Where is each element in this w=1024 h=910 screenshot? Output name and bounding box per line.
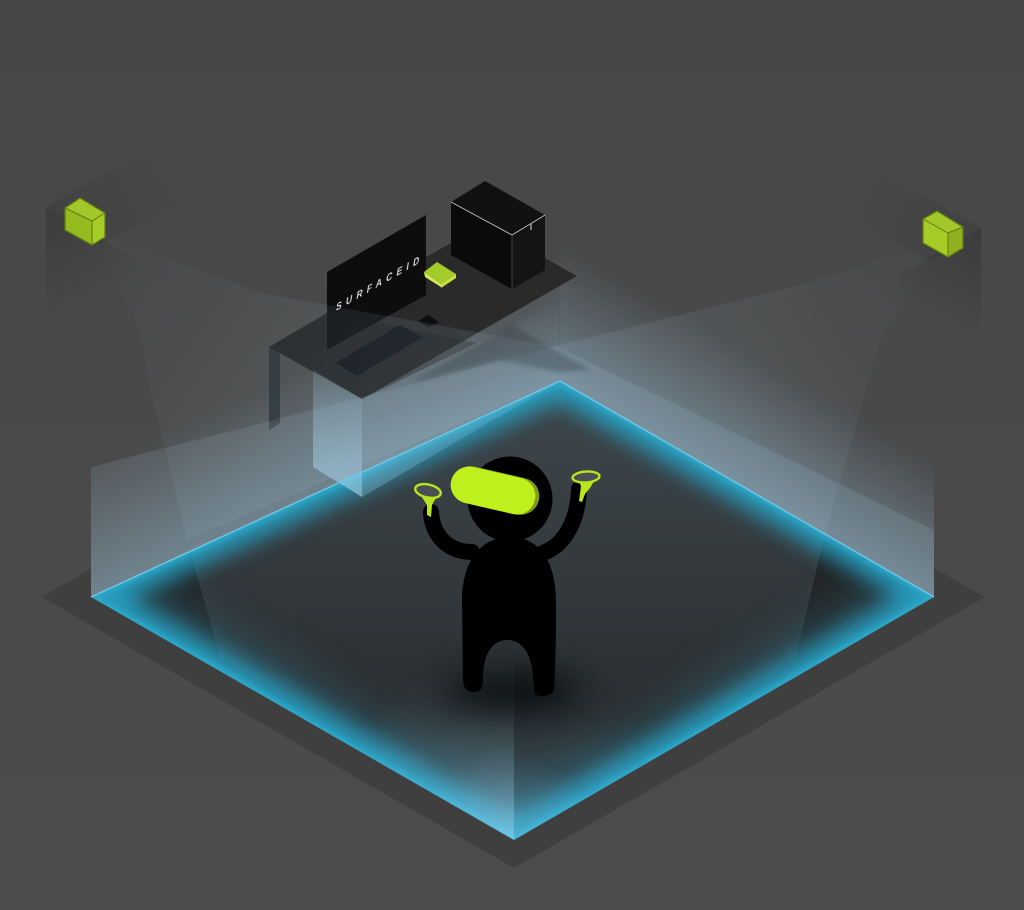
brand text: SURFACEID: [336, 253, 423, 314]
left camera corner shade: [46, 140, 230, 335]
desk shadow wedge: [410, 325, 590, 383]
floor edge line: [91, 381, 934, 597]
front walls: [384, 691, 601, 840]
person: [414, 456, 600, 696]
floor: [91, 381, 934, 840]
computer box: [451, 181, 545, 289]
light beam from right camera: [91, 240, 945, 597]
keyboard: [335, 325, 423, 376]
desk front shading: [269, 312, 477, 399]
desk top: [269, 224, 577, 399]
desk: [269, 181, 577, 430]
back walls: [91, 244, 934, 597]
lit floor area: [194, 392, 822, 772]
head: [468, 456, 552, 542]
right controller: [572, 471, 600, 502]
left controller: [414, 482, 442, 517]
mouse pad: [418, 315, 439, 327]
monitor: [327, 215, 426, 350]
body: [462, 537, 556, 696]
floor shadow: [42, 568, 985, 868]
green device: [424, 262, 456, 288]
light beam from left camera: [95, 230, 934, 597]
person shadow: [438, 672, 582, 712]
right camera corner shade: [820, 165, 981, 360]
left camera: [65, 198, 105, 245]
right arm: [543, 489, 579, 553]
floor glow: [91, 381, 934, 840]
left arm: [431, 512, 472, 552]
headset: [447, 463, 543, 518]
desk leg: [269, 347, 280, 430]
right camera: [923, 211, 963, 257]
desk volume: [313, 303, 560, 497]
